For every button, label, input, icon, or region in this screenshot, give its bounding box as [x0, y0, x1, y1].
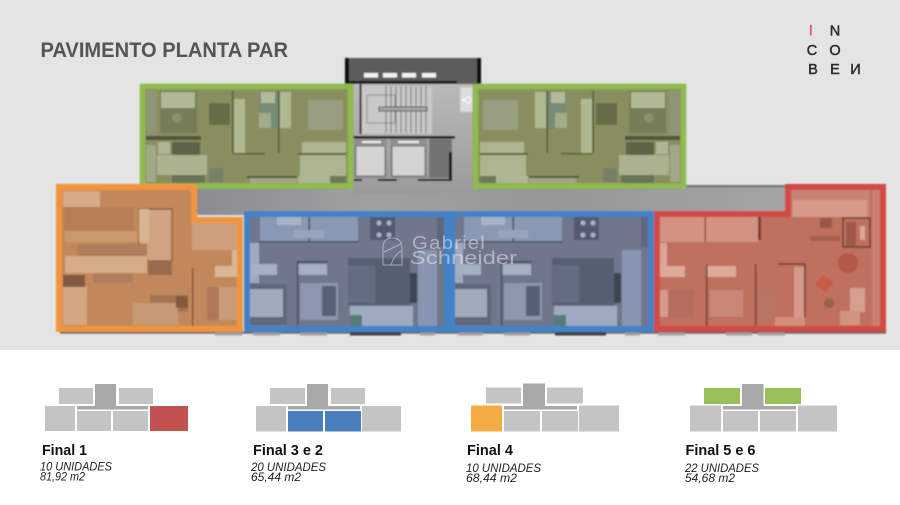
legend item: Final 3 e 2: [250, 384, 401, 484]
logo: Incoben: E: [830, 62, 840, 78]
panel: blue unit right (Final 2): [448, 211, 654, 332]
logo: Incoben: O: [829, 43, 841, 59]
key plan: Final 3 e 2: [256, 384, 401, 432]
legend item: Final 4: Final 4: [467, 442, 514, 459]
facade windows strip: [60, 332, 886, 334]
legend item: Final 3 e 2: 20 UNIDADES: [250, 460, 326, 474]
legend item: Final 5 e 6: Final 5 e 6: [686, 442, 756, 459]
building core: [345, 58, 481, 194]
legend item: Final 4: 68,44 m2: [466, 471, 517, 485]
logo: Incoben: C: [807, 43, 817, 59]
legend item: Final 1: Final 1: [42, 442, 87, 459]
logo: Incoben: B: [808, 62, 818, 78]
legend item: Final 4: [466, 384, 619, 485]
legend item: Final 5 e 6: 54,68 m2: [685, 471, 735, 485]
watermark: Schneider: [410, 248, 517, 268]
logo: Incoben: [807, 24, 861, 78]
key plan: Final 5 e 6: [690, 384, 837, 432]
legend item: Final 3 e 2: Final 3 e 2: [253, 442, 323, 459]
elevators: [354, 139, 427, 178]
legend item: Final 5 e 6: 22 UNIDADES: [684, 461, 759, 475]
legend item: Final 1: 81,92 m2: [40, 470, 85, 484]
bottom legend background: [0, 350, 900, 505]
corridor: [197, 187, 790, 215]
legend item: Final 5 e 6: [684, 384, 837, 485]
watermark: Gabriel: [412, 233, 486, 253]
panel: green unit right (Final 6): [472, 84, 686, 189]
watermark: [383, 233, 517, 268]
centre divider: [446, 211, 455, 332]
title: PAVIMENTO PLANTA PAR: [40, 39, 288, 62]
key plan: Final 1: [45, 384, 188, 431]
key plan: Final 4: [471, 384, 619, 432]
top background panel: [0, 0, 900, 350]
logo: Incoben: N: [830, 24, 840, 40]
legend item: Final 3 e 2: 65,44 m2: [251, 470, 301, 484]
panel: blue unit left (Final 3): [244, 211, 450, 332]
legend item: Final 1: 10 UNIDADES: [40, 460, 112, 474]
icon: accessibility sign: [460, 87, 473, 112]
panel: orange unit (Final 4): [56, 184, 243, 332]
panel: green unit left (Final 5): [140, 84, 354, 189]
logo: Incoben: N: [850, 62, 861, 78]
panel: red unit (Final 1): [654, 184, 886, 332]
stairs: [360, 84, 432, 134]
legend item: Final 4: 10 UNIDADES: [466, 461, 541, 475]
icon: watermark house: [383, 238, 402, 265]
legend item: Final 1: [40, 384, 188, 484]
floor plan: [56, 58, 886, 334]
